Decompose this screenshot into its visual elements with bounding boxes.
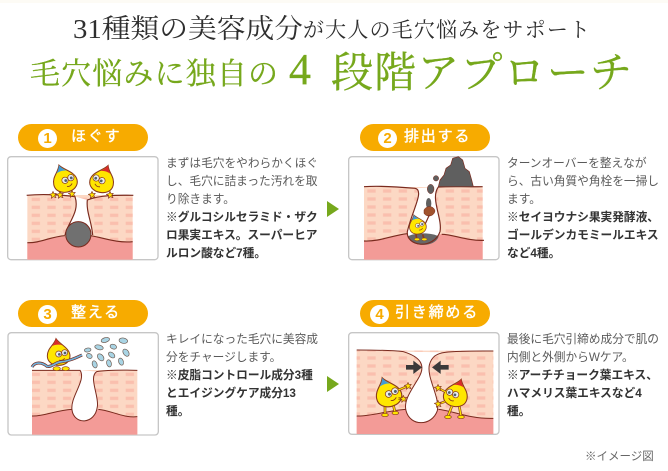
text: step 3: キレイになった毛穴に美容成 [166, 333, 318, 346]
step 3 label: 整える [71, 304, 121, 321]
icon: blue mascot [50, 162, 79, 194]
text: step 3: とエイジングケア成分13 [166, 387, 296, 400]
text: step 4: ※アーチチョーク葉エキス、 [507, 369, 658, 382]
step 3 label: 3 [43, 306, 52, 322]
hose [32, 355, 82, 367]
panel: step 2 illustration [348, 156, 500, 260]
icon: arrow right [406, 361, 422, 374]
icon: blue mascot [373, 375, 411, 417]
icon: red mascot [88, 162, 117, 195]
arrow: step 1 to 2 [327, 201, 339, 217]
text: step 1: し、毛穴に詰まった汚れを取 [166, 175, 317, 188]
text: step 3 [166, 332, 318, 418]
text: step 4: 種。 [507, 405, 530, 418]
text: step 2: など4種。 [507, 247, 560, 260]
heading: line 1 [73, 14, 590, 44]
text: step 1: り除きます。 [166, 193, 235, 206]
dirt particles [422, 176, 439, 232]
text: step 2: ら、古い角質や角栓を一掃し [507, 175, 659, 188]
text: step 4 [507, 332, 659, 418]
step 2 label: 2 [383, 130, 392, 146]
text: step 3: 種。 [166, 405, 189, 418]
heading: line 1: が大人の毛穴悩みをサポート [303, 18, 590, 42]
heading: line 2 [30, 45, 632, 97]
panel: step 1 illustration [7, 156, 159, 260]
icon: mascot in pore [407, 213, 427, 241]
text: step 3: 分をチャージします。 [166, 351, 281, 364]
step 3 label [18, 300, 148, 327]
text: step 3: ※皮脂コントロール成分3種 [166, 369, 313, 382]
dirt ball [66, 222, 91, 247]
step 1 label: 1 [43, 130, 52, 146]
step 4 label [360, 300, 490, 327]
text: step 2: ターンオーバーを整えなが [507, 157, 647, 170]
step 2 label: 排出する [404, 128, 471, 145]
icon: arrow left [432, 361, 449, 374]
step 1 label [18, 124, 148, 151]
arrow: step 3 to 4 [327, 376, 339, 392]
text: step 4: 最後に毛穴引締め成分で肌の [507, 333, 659, 346]
text: step 2: ゴールデンカモミールエキス [507, 229, 659, 242]
heading: line 2: 段階アプローチ [331, 51, 632, 97]
text: step 2 [507, 156, 659, 260]
heading: line 2: 4 [289, 45, 311, 94]
step 2 label [360, 124, 490, 151]
text: step 1: ルロン酸など7種。 [166, 247, 266, 260]
step 1 label: ほぐす [71, 128, 121, 145]
heading: line 1: 31種類の美容成分 [73, 14, 303, 44]
water droplets [84, 337, 130, 369]
note: image only: ※イメージ図 [585, 451, 654, 463]
panel: step 3 illustration [7, 332, 159, 436]
dirt pile [438, 157, 473, 187]
text: step 1 [166, 156, 318, 260]
mascot hands [49, 190, 113, 198]
title [0, 0, 668, 97]
heading: line 2: 毛穴悩みに独自の [30, 58, 278, 91]
text: step 1: ※グルコシルセラミド・ザク [166, 211, 318, 224]
text: step 4: 内側と外側からWケア。 [507, 351, 634, 364]
step 4 label: 引き締める [395, 304, 479, 321]
text: step 1: まずは毛穴をやわらかくほぐ [166, 157, 318, 170]
text: step 2: ※セイヨウナシ果実発酵液、 [507, 211, 659, 224]
text: step 2: ます。 [507, 193, 541, 206]
panel: step 4 illustration [348, 332, 500, 435]
step 4 label: 4 [375, 306, 384, 322]
text: step 1: ロ果実エキス。スーパーヒア [166, 229, 317, 242]
icon: mascot with hose [47, 339, 70, 371]
icon: red mascot [434, 377, 470, 419]
text: step 4: ハマメリス葉エキスなど4 [507, 387, 642, 400]
